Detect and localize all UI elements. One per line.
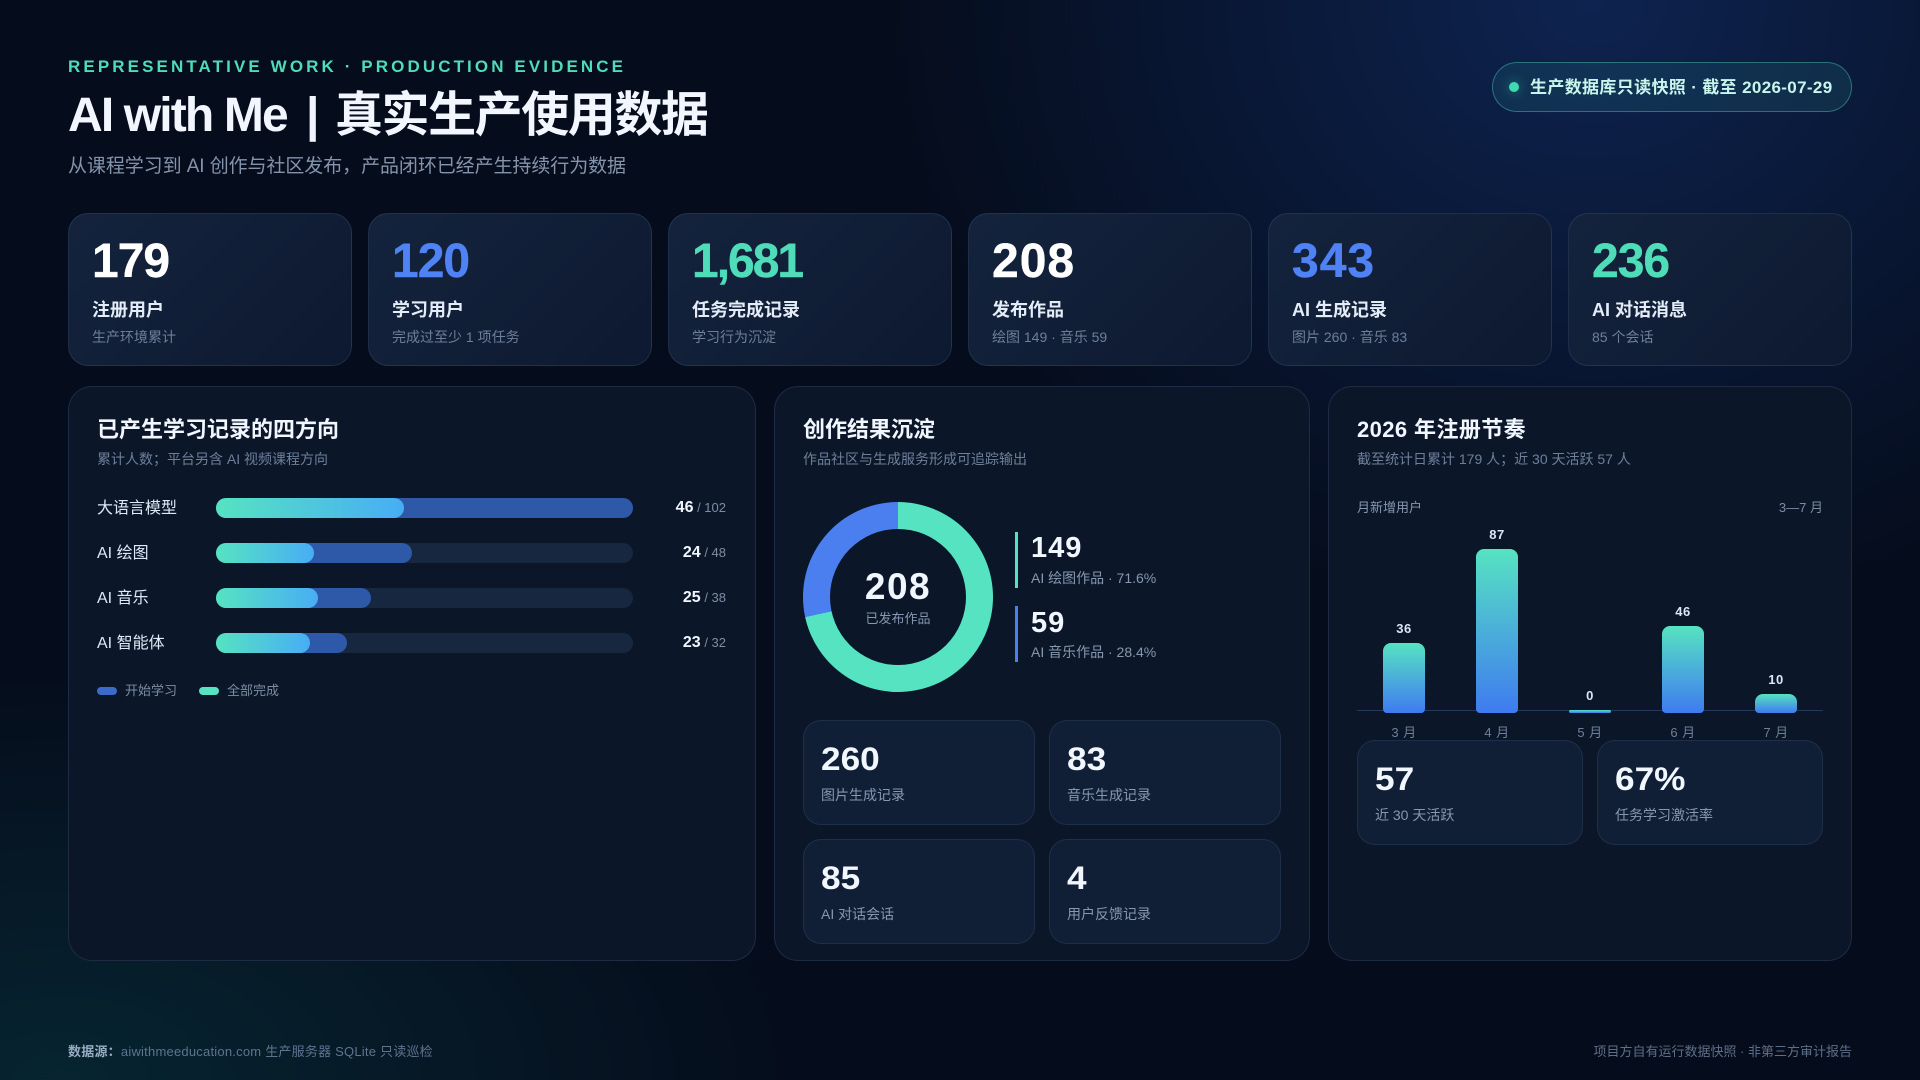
chart caption: 月新增用户	[1357, 500, 1422, 515]
legend: drawing works: AI 绘图作品 · 71.6%	[1031, 570, 1156, 586]
row: AI music: 25 / 38	[683, 589, 726, 606]
footer source: 数据源：aiwithmeeducation.com 生产服务器 SQLite 只读巡检	[68, 1044, 433, 1059]
value labels: 36	[1396, 621, 1412, 636]
kpi card: registered users: 生产环境累计	[92, 329, 176, 345]
row: LLM	[97, 498, 726, 518]
row: AI agents	[97, 633, 726, 653]
title: |	[306, 89, 318, 142]
value labels: 10	[1768, 672, 1784, 687]
mini card: activation rate: 67%	[1615, 761, 1685, 797]
panel: registration rhythm	[1328, 386, 1852, 961]
mini card: feedback: 用户反馈记录	[1067, 906, 1151, 922]
kpi card: published works: 发布作品	[992, 300, 1064, 320]
mini card: chats	[803, 839, 1035, 944]
kpi card: task records	[668, 213, 952, 366]
bar: July	[1755, 694, 1797, 713]
kpi card: ai generation: 图片 260 · 音乐 83	[1292, 329, 1407, 345]
eyebrow: REPRESENTATIVE WORK · PRODUCTION EVIDENCE	[68, 57, 626, 76]
month labels: 6 月	[1670, 725, 1696, 740]
mini card: music	[1049, 720, 1281, 825]
month labels: 7 月	[1763, 725, 1789, 740]
kpi card: published works	[968, 213, 1252, 366]
mini card: music: 83	[1067, 741, 1106, 777]
legend: drawing works: 149	[1031, 532, 1082, 564]
row: AI agents: AI 智能体	[97, 635, 165, 652]
footer note: 项目方自有运行数据快照 · 非第三方审计报告	[1593, 1044, 1852, 1059]
panel subheading: 截至统计日累计 179 人；近 30 天活跃 57 人	[1357, 451, 1631, 467]
row: AI music: AI 音乐	[97, 590, 149, 607]
row: LLM: 46 / 102	[676, 499, 726, 516]
month labels: 5 月	[1577, 725, 1603, 740]
kpi card: ai messages: 236	[1592, 235, 1669, 288]
panel: learning directions	[68, 386, 756, 961]
kpi card: ai messages: 85 个会话	[1592, 329, 1653, 345]
value labels: 46	[1675, 604, 1691, 619]
kpi card: learning users: 学习用户	[392, 300, 464, 320]
row: AI drawing: 24 / 48	[683, 544, 726, 561]
bar: June	[1662, 626, 1704, 713]
header	[68, 57, 707, 177]
kpi card: ai messages: AI 对话消息	[1592, 300, 1687, 320]
bar chart	[1357, 527, 1823, 740]
status pill	[1492, 62, 1852, 112]
panel: creation results	[774, 386, 1310, 961]
month labels: 4 月	[1484, 725, 1510, 740]
legend	[97, 683, 279, 698]
mini card: images	[803, 720, 1035, 825]
row: AI music	[97, 588, 726, 608]
kpi card: ai generation: 343	[1292, 235, 1375, 288]
legend: music works: 59	[1031, 607, 1065, 639]
kpi card: registered users: 注册用户	[92, 300, 164, 320]
subtitle: 从课程学习到 AI 创作与社区发布，产品闭环已经产生持续行为数据	[68, 156, 626, 177]
kpi card: learning users: 完成过至少 1 项任务	[392, 329, 520, 345]
mini card: feedback	[1049, 839, 1281, 944]
row: AI drawing	[97, 543, 726, 563]
kpi card: ai generation: AI 生成记录	[1292, 300, 1387, 320]
status text: 生产数据库只读快照 · 截至 2026-07-29	[1530, 78, 1833, 97]
donut value: 208	[865, 566, 931, 607]
kpi card: registered users	[68, 213, 352, 366]
bar: March	[1383, 643, 1425, 713]
panel heading: 2026 年注册节奏	[1357, 417, 1526, 442]
row: LLM: 大语言模型	[97, 500, 177, 517]
legend: drawing works	[1015, 532, 1156, 588]
mini card: chats: AI 对话会话	[821, 906, 894, 922]
title	[68, 89, 707, 142]
value labels	[1396, 527, 1784, 703]
mini card: music: 音乐生成记录	[1067, 787, 1151, 803]
title: AI with Me	[68, 89, 287, 142]
panel heading: 已产生学习记录的四方向	[97, 417, 339, 442]
mini card: active users: 57	[1375, 761, 1414, 797]
mini card: feedback: 4	[1067, 860, 1087, 896]
panel subheading: 累计人数；平台另含 AI 视频课程方向	[97, 451, 328, 467]
mini card: activation rate	[1597, 740, 1823, 845]
chart range: 3—7 月	[1779, 500, 1823, 515]
mini card: active users	[1357, 740, 1583, 845]
kpi card: learning users: 120	[392, 235, 469, 288]
panel heading: 创作结果沉淀	[803, 417, 935, 442]
kpi card: task records: 1,681	[692, 235, 802, 288]
mini card: active users: 近 30 天活跃	[1375, 807, 1454, 823]
value labels: 0	[1586, 688, 1594, 703]
mini card: images: 260	[821, 741, 880, 777]
month labels	[1391, 725, 1789, 740]
value labels: 87	[1489, 527, 1505, 542]
mini card: images: 图片生成记录	[821, 787, 905, 803]
row: AI agents: 23 / 32	[683, 634, 726, 651]
status dot	[1509, 82, 1519, 92]
legend: 开始学习	[125, 683, 177, 698]
legend: 全部完成	[227, 683, 279, 698]
month labels: 3 月	[1391, 725, 1417, 740]
legend: music works	[1015, 606, 1156, 662]
bar: April	[1476, 549, 1518, 713]
kpi card: learning users	[368, 213, 652, 366]
mini card: activation rate: 任务学习激活率	[1615, 807, 1713, 823]
donut chart	[803, 502, 993, 692]
donut label: 已发布作品	[865, 611, 930, 626]
kpi card: ai generation	[1268, 213, 1552, 366]
kpi card: task records: 学习行为沉淀	[692, 329, 776, 345]
kpi card: registered users: 179	[92, 235, 169, 288]
mini card: chats: 85	[821, 860, 860, 896]
title: 真实生产使用数据	[335, 89, 707, 142]
kpi card: task records: 任务完成记录	[692, 300, 800, 320]
legend: music works: AI 音乐作品 · 28.4%	[1031, 644, 1156, 660]
kpi card: ai messages	[1568, 213, 1852, 366]
kpi card: published works: 208	[992, 235, 1075, 288]
row: AI drawing: AI 绘图	[97, 545, 149, 562]
panel subheading: 作品社区与生成服务形成可追踪输出	[803, 451, 1027, 467]
kpi card: published works: 绘图 149 · 音乐 59	[992, 329, 1107, 345]
bar: May	[1569, 710, 1611, 713]
